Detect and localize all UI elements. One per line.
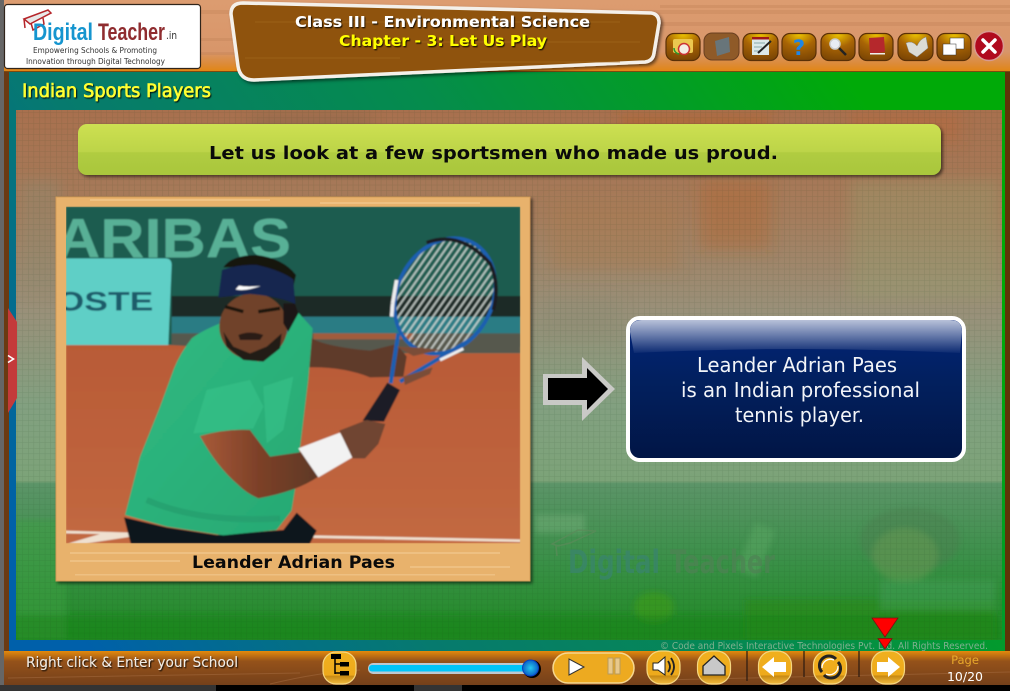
near arm	[200, 430, 318, 498]
banner text: Let us look at a few sportsmen who made us proud.	[209, 143, 778, 164]
page counter: Page	[951, 653, 979, 667]
logo tagline: Innovation through Digital Technology	[26, 57, 165, 66]
icon: home	[698, 651, 730, 684]
watermark: Digital Teacher: Teacher	[670, 543, 775, 581]
icon: page tree	[323, 652, 356, 684]
logo tagline: Empowering Schools & Promoting	[33, 46, 157, 55]
copyright: © Code and Pixels Interactive Technologies Pvt. Ltd. All Rights Reserved.	[660, 641, 988, 652]
green shirt	[125, 313, 313, 535]
far hand fingers	[397, 347, 440, 385]
sponsor board	[57, 258, 172, 345]
logo card	[4, 4, 200, 68]
icon: reference book	[704, 33, 739, 60]
panel: photo frame	[56, 197, 530, 581]
logo wordmark	[33, 19, 177, 46]
section heading: Indian Sports Players	[22, 80, 211, 102]
racket	[362, 236, 498, 422]
icon: close	[974, 32, 1004, 60]
separators	[747, 651, 859, 681]
chapter title: Chapter - 3: Let Us Play	[339, 32, 547, 50]
icon: previous	[758, 651, 792, 684]
left edge strip	[0, 0, 4, 691]
title plaque	[231, 3, 659, 80]
icon: red next indicator	[872, 618, 898, 649]
icon: sound	[647, 651, 680, 684]
icon: resize windows	[937, 34, 971, 60]
sponsor lettering: ARIBAS	[56, 207, 291, 270]
logo wordmark: .in	[166, 29, 177, 42]
status text: Right click & Enter your School	[26, 655, 238, 671]
info box text: tennis player.	[735, 403, 864, 427]
icon: next	[872, 651, 904, 684]
info box text: is an Indian professional	[681, 378, 920, 402]
watermark: Digital Teacher	[552, 530, 775, 581]
page counter	[947, 653, 983, 684]
icon: history folder	[666, 34, 700, 60]
info box text	[681, 353, 920, 427]
sponsor board: OSTE	[57, 287, 153, 317]
caption: Leander Adrian Paes	[192, 553, 395, 573]
photo: tennis player	[56, 207, 520, 543]
icon: open book	[898, 34, 933, 60]
banner	[78, 124, 941, 175]
icon: magnifier	[821, 34, 855, 60]
logo wordmark: Teacher	[98, 19, 165, 46]
icon: help: ?	[793, 36, 805, 60]
page counter: 10/20	[947, 669, 983, 684]
logo tagline	[26, 46, 165, 66]
icon: graduation cap	[24, 10, 51, 30]
course title: Class III - Environmental Science	[295, 13, 590, 31]
far arm	[308, 338, 407, 377]
left slide-out tab	[8, 308, 17, 413]
bottom dark strip	[0, 685, 1010, 691]
progress slider	[368, 660, 541, 678]
arrow	[543, 357, 615, 421]
wristband	[298, 433, 354, 477]
top wood header	[4, 0, 1010, 72]
panel: faded background photo	[16, 110, 1002, 640]
clay court	[66, 345, 520, 543]
icon: help	[782, 34, 816, 60]
watermark: Digital Teacher: Digital	[568, 543, 660, 581]
info box	[628, 318, 964, 460]
play and pause control	[553, 653, 634, 683]
toolbar icons	[666, 32, 1004, 60]
shorts	[124, 513, 317, 543]
icon: reload	[814, 651, 846, 684]
icon: dictionary	[859, 34, 893, 60]
head	[218, 255, 298, 362]
bottom wood bar	[4, 651, 1010, 685]
logo wordmark: Digital	[33, 19, 93, 46]
info box text: Leander Adrian Paes	[697, 353, 897, 377]
near hand	[339, 420, 385, 458]
icon: notepad	[743, 34, 778, 60]
